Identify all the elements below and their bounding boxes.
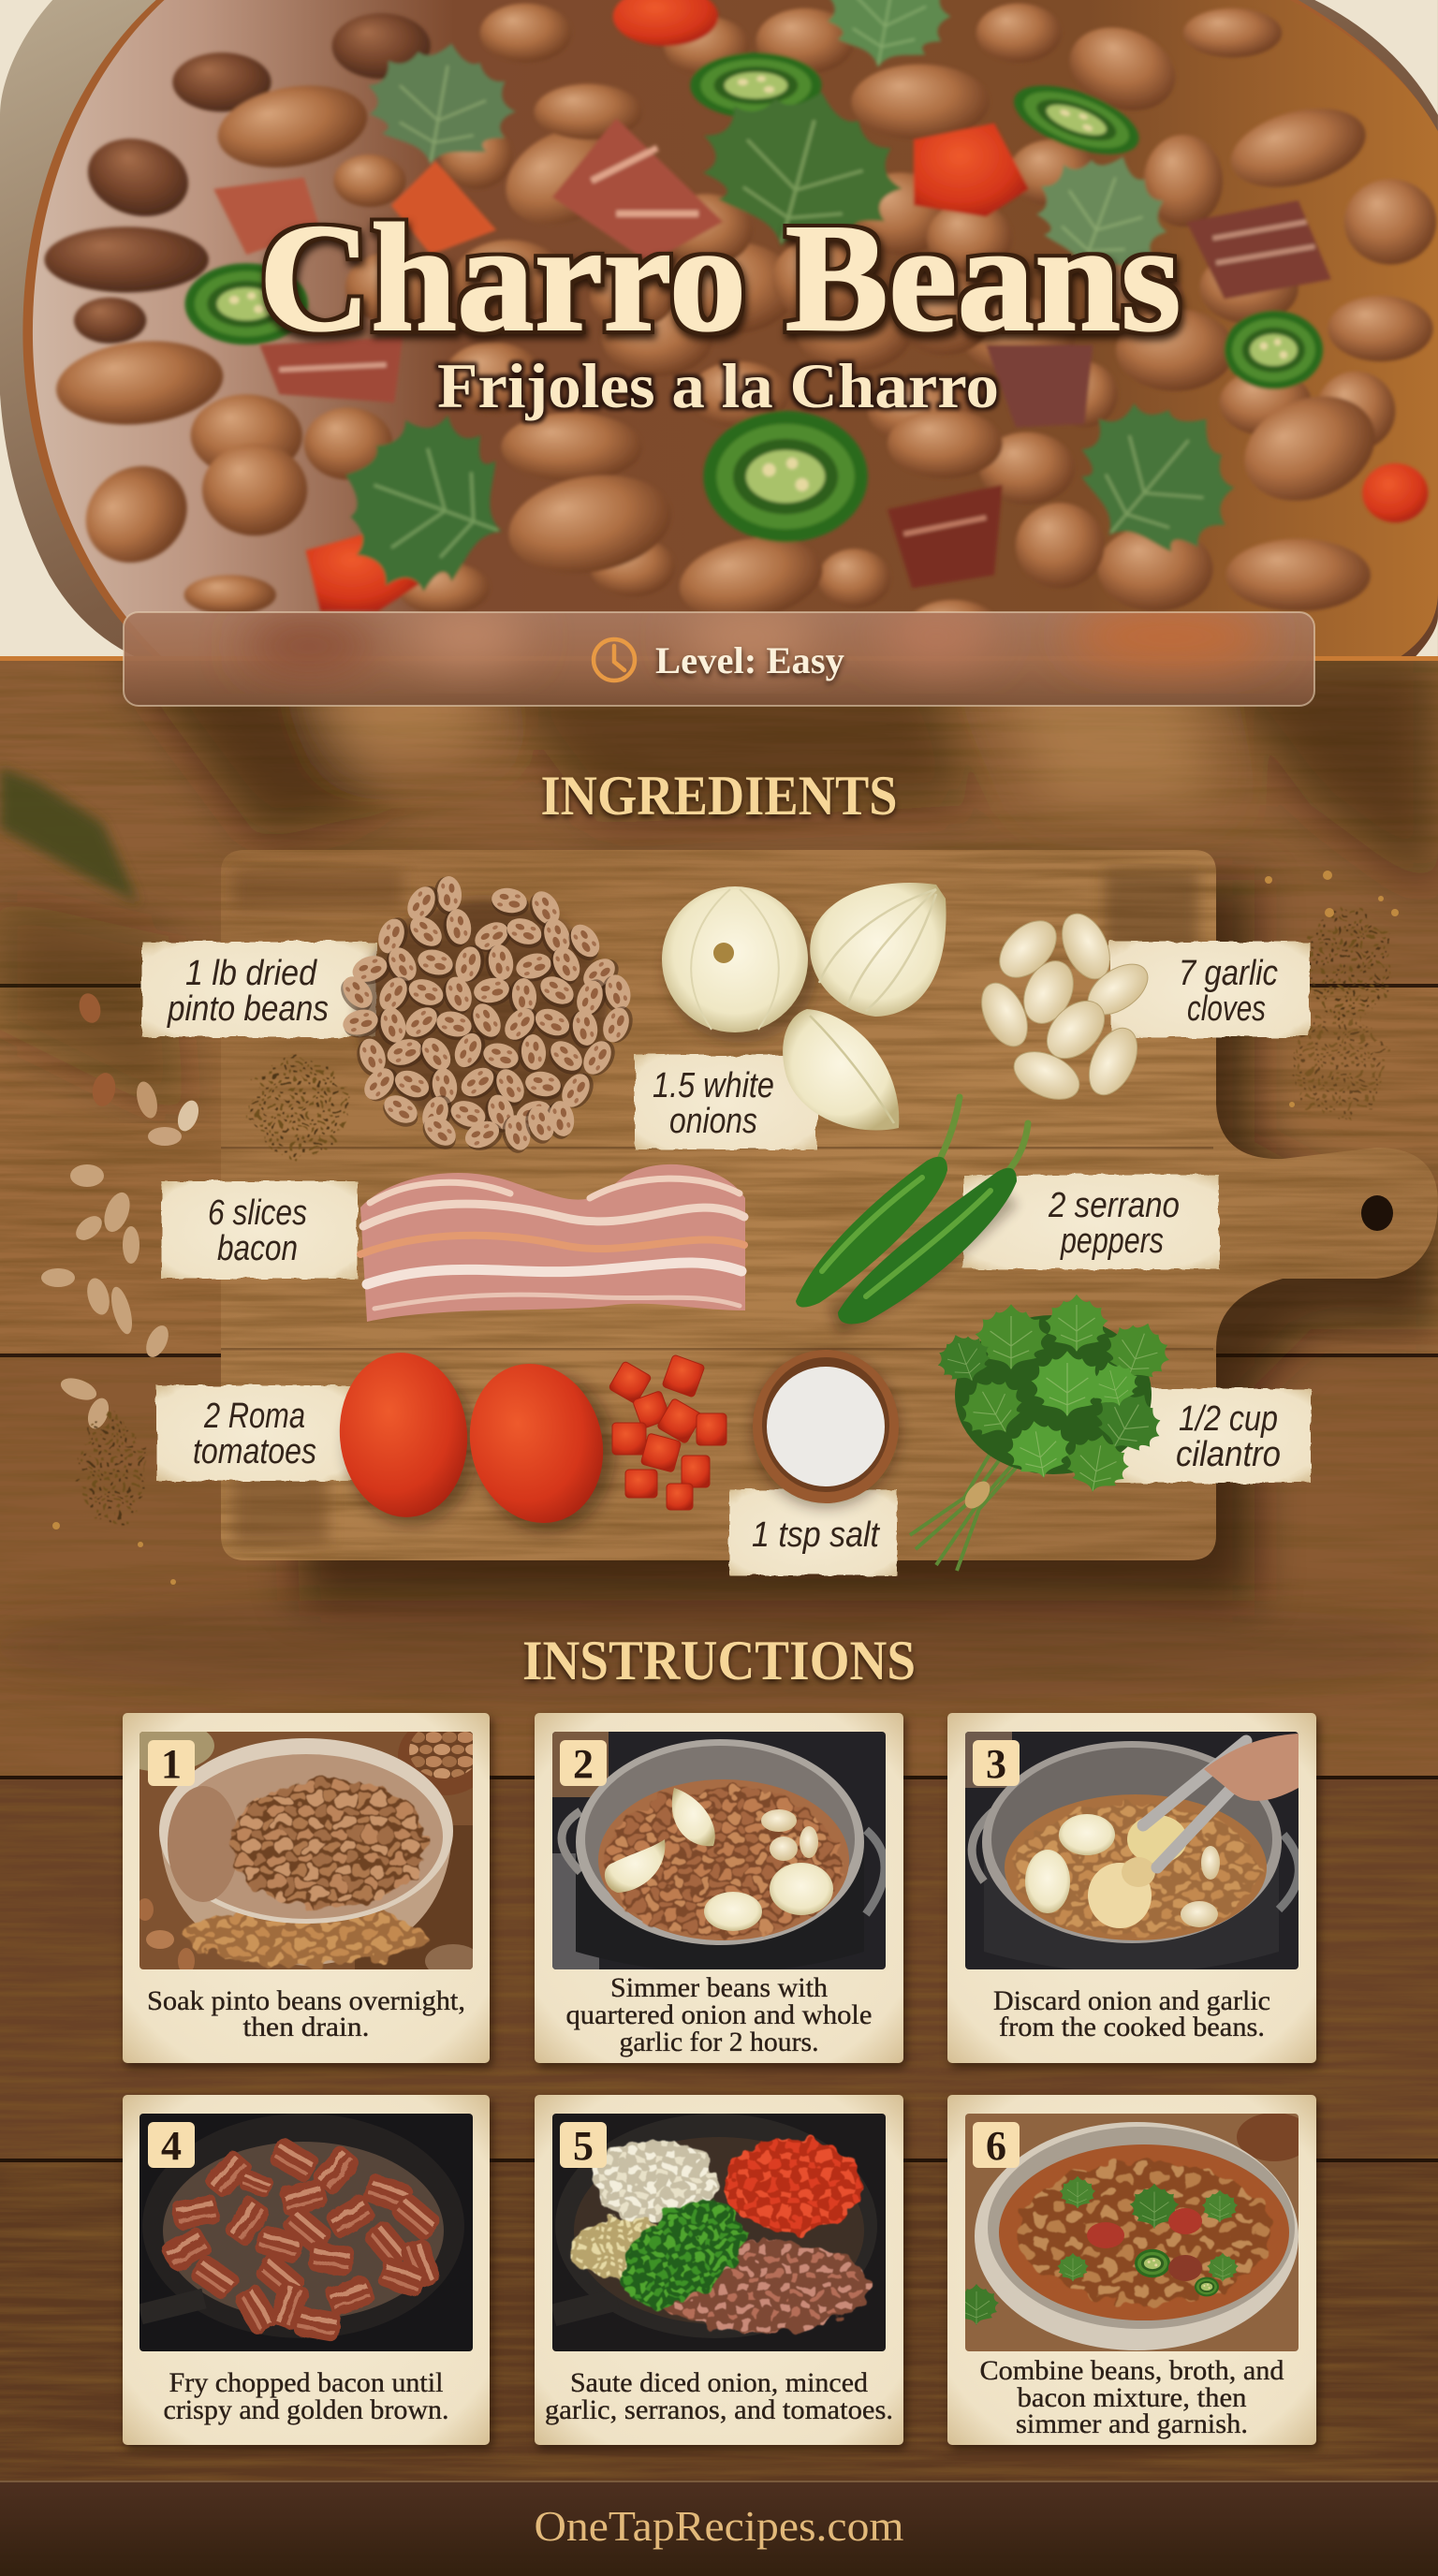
caption 6: simmer and garnish. bbox=[1016, 2408, 1248, 2439]
salt bowl bbox=[753, 1350, 899, 1507]
filler beans bbox=[184, 4, 1433, 666]
orange divider bbox=[0, 656, 1438, 661]
icon: clock bbox=[594, 639, 635, 681]
bacon bbox=[360, 1164, 745, 1322]
label: serrano peppers: 2 serrano bbox=[1048, 1186, 1180, 1225]
spices and shells scattered bbox=[41, 871, 1399, 1585]
step 4 card bbox=[123, 2095, 490, 2445]
number badge 4: 4 bbox=[161, 2123, 182, 2169]
hero subtitle: Frijoles a la Charro bbox=[437, 350, 999, 421]
caption 3: from the cooked beans. bbox=[999, 2012, 1265, 2042]
label: bacon bbox=[161, 1181, 358, 1279]
number badge 6 bbox=[973, 2122, 1020, 2169]
main beans bbox=[44, 13, 431, 344]
label: white onions: onions bbox=[669, 1102, 757, 1141]
label: salt: 1 tsp salt bbox=[752, 1515, 880, 1555]
label: bacon: 6 slices bbox=[208, 1193, 307, 1233]
instructions heading: INSTRUCTIONS bbox=[522, 1630, 916, 1691]
photo: frying bacon bbox=[138, 2114, 473, 2351]
hero photo: bowl of charro beans bbox=[0, 0, 1438, 666]
handle hole bbox=[1361, 1195, 1393, 1231]
cilantro leaves bbox=[357, 31, 525, 178]
hero title: Charro Beans bbox=[258, 192, 1181, 363]
diced tomato bbox=[609, 1354, 726, 1510]
label: serrano peppers bbox=[963, 1175, 1219, 1269]
label: pinto beans: pinto beans bbox=[167, 989, 329, 1029]
caption 5: garlic, serranos, and tomatoes. bbox=[545, 2394, 893, 2425]
caption 1 bbox=[147, 1985, 465, 2042]
caption 2: quartered onion and whole bbox=[565, 1999, 873, 2030]
caption 2: Simmer beans with bbox=[610, 1972, 828, 2003]
jalapeno slices bbox=[703, 411, 868, 542]
caption 2 bbox=[565, 1972, 873, 2057]
label: tomatoes bbox=[156, 1385, 353, 1481]
label: white onions bbox=[635, 1055, 816, 1149]
cutting board bbox=[221, 850, 1438, 1601]
cilantro bunch bbox=[910, 1295, 1179, 1571]
caption 6: Combine beans, broth, and bbox=[979, 2355, 1284, 2386]
step 1 card bbox=[111, 1713, 492, 2063]
photo: simmering pot bbox=[552, 1732, 886, 1973]
caption 6: bacon mixture, then bbox=[1017, 2382, 1247, 2413]
number badge 3: 3 bbox=[986, 1741, 1006, 1787]
serrano peppers bbox=[796, 1097, 1028, 1324]
ingredients heading: INGREDIENTS bbox=[541, 765, 897, 827]
label: cilantro: cilantro bbox=[1176, 1435, 1281, 1474]
roma tomatoes bbox=[333, 1347, 726, 1538]
tomato pieces bbox=[213, 0, 1428, 611]
caption 1: Soak pinto beans overnight, bbox=[147, 1985, 465, 2016]
number badge 1: 1 bbox=[161, 1741, 182, 1787]
pinto beans pile bbox=[334, 875, 638, 1156]
label: cilantro bbox=[1115, 1388, 1311, 1483]
number badge 1 bbox=[148, 1740, 195, 1787]
caption 4: crispy and golden brown. bbox=[163, 2394, 449, 2425]
number badge 3 bbox=[973, 1740, 1020, 1787]
footer website text: OneTapRecipes.com bbox=[534, 2502, 904, 2550]
number badge 4 bbox=[148, 2122, 195, 2169]
caption 6 bbox=[979, 2355, 1284, 2439]
label: pinto beans: 1 lb dried bbox=[185, 954, 318, 993]
label: pinto beans bbox=[142, 942, 376, 1037]
number badge 5: 5 bbox=[573, 2123, 594, 2169]
caption 2: garlic for 2 hours. bbox=[620, 2027, 818, 2057]
number badge 5 bbox=[560, 2122, 607, 2169]
number badge 6: 6 bbox=[986, 2123, 1006, 2169]
garlic cloves bbox=[973, 906, 1157, 1109]
caption 3 bbox=[993, 1985, 1270, 2042]
label: white onions: 1.5 white bbox=[653, 1066, 774, 1105]
label: cilantro: 1/2 cup bbox=[1179, 1399, 1278, 1439]
photo: sauteing vegetables bbox=[550, 2114, 886, 2351]
label: garlic: 7 garlic bbox=[1179, 954, 1278, 993]
caption 4: Fry chopped bacon until bbox=[169, 2367, 444, 2398]
photo: soaking beans bbox=[111, 1717, 492, 1978]
number badge 2: 2 bbox=[573, 1741, 594, 1787]
label: tomatoes: tomatoes bbox=[193, 1432, 316, 1471]
caption 3: Discard onion and garlic bbox=[993, 1985, 1270, 2016]
step 6 card bbox=[947, 2095, 1316, 2445]
step 2 card bbox=[535, 1713, 903, 2063]
step 3 card bbox=[947, 1713, 1316, 2063]
level text: Level: Easy bbox=[655, 639, 844, 681]
label: serrano peppers: peppers bbox=[1060, 1222, 1164, 1261]
caption 1: then drain. bbox=[243, 2012, 369, 2042]
label: tomatoes: 2 Roma bbox=[203, 1397, 305, 1436]
onions bbox=[662, 883, 946, 1131]
caption 4 bbox=[163, 2367, 449, 2425]
wood background bbox=[0, 655, 1438, 2482]
label: bacon: bacon bbox=[217, 1229, 298, 1268]
footer bbox=[0, 2481, 1438, 2576]
label: garlic: cloves bbox=[1187, 989, 1266, 1029]
photo: finished stew bbox=[954, 2113, 1312, 2351]
label: garlic bbox=[1110, 942, 1310, 1037]
number badge 2 bbox=[560, 1740, 607, 1787]
step 5 card bbox=[535, 2095, 903, 2445]
level bar bbox=[124, 608, 1314, 706]
label: salt bbox=[729, 1489, 897, 1575]
caption 5: Saute diced onion, minced bbox=[570, 2367, 868, 2398]
photo: discarding onion bbox=[965, 1732, 1299, 1973]
caption 5 bbox=[545, 2367, 893, 2425]
bacon pieces bbox=[259, 118, 1331, 588]
